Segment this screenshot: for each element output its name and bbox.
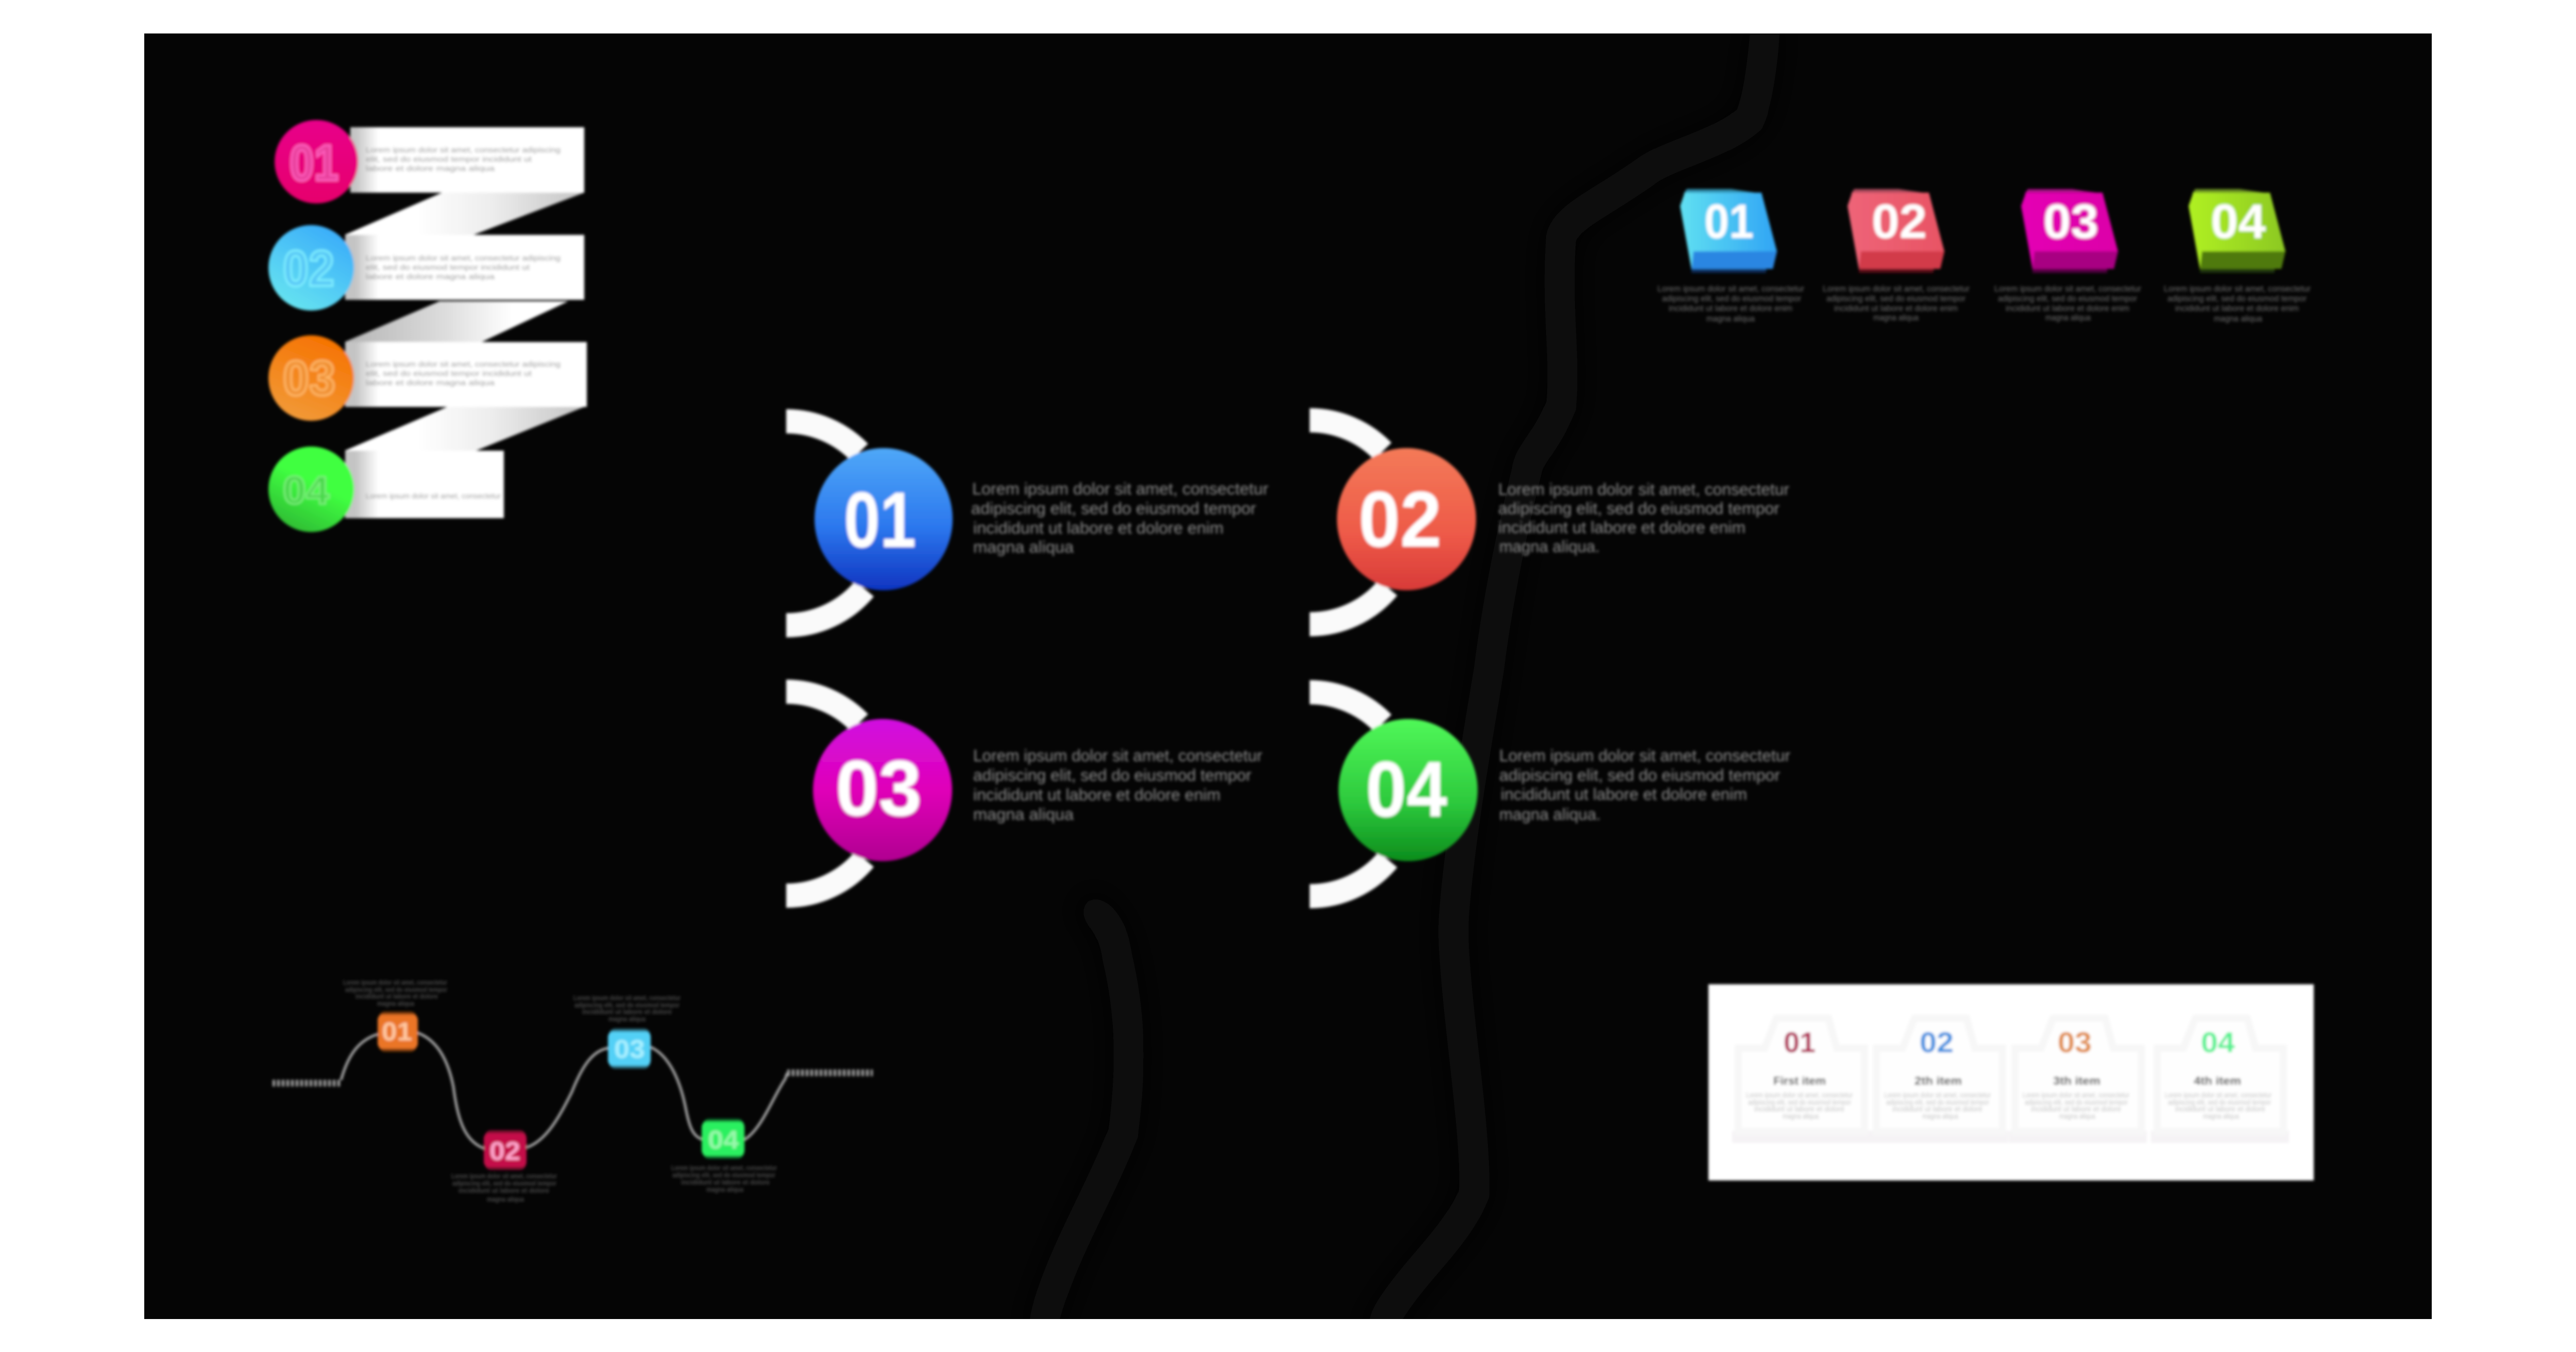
badge text 04: incididunt ut labore et dolore enim bbox=[1501, 785, 1747, 803]
wave label 03 bbox=[573, 994, 681, 1023]
number circle 02 bbox=[268, 225, 354, 311]
block 03: 03 bbox=[2043, 194, 2098, 248]
block 01 text: magna aliqua bbox=[1706, 314, 1755, 323]
block 01 text bbox=[1657, 284, 1804, 323]
wave label 02: incididunt ut labore et dolore bbox=[459, 1186, 549, 1194]
badge text 03 bbox=[973, 746, 1262, 824]
card 04: magna aliqua bbox=[2203, 1112, 2240, 1121]
number circle 03: 03 bbox=[283, 351, 335, 406]
card 01: 01 bbox=[1784, 1026, 1816, 1058]
panel: white card strip bbox=[1708, 984, 2314, 1180]
marker 02 bbox=[484, 1130, 527, 1170]
panel: glossy badge 01 bbox=[786, 421, 1268, 625]
faint smoke background bbox=[1039, 21, 1766, 1339]
wave label 03: incididunt ut labore et dolore bbox=[582, 1007, 672, 1016]
badge text 03: adipiscing elit, sed do eiusmod tempor bbox=[973, 766, 1251, 784]
block 03 text: Lorem ipsum dolor sit amet, consectetur bbox=[1994, 284, 2141, 294]
card 02: 2th item bbox=[1914, 1074, 1962, 1087]
card 03: incididunt ut labore et dolore bbox=[2031, 1105, 2121, 1114]
badge text 02: Lorem ipsum dolor sit amet, consectetur bbox=[1498, 480, 1789, 499]
marker 03: 03 bbox=[614, 1035, 645, 1064]
card 01: Lorem ipsum dolor sit amet, consectetur bbox=[1746, 1091, 1853, 1100]
block 04 text bbox=[2164, 284, 2311, 323]
marker 04 bbox=[702, 1119, 744, 1159]
ribbon bar 1 bbox=[350, 127, 584, 193]
block 03 text bbox=[1994, 284, 2141, 322]
block 03 bbox=[2021, 189, 2118, 273]
block 01 bbox=[1680, 189, 1777, 273]
badge text 01: incididunt ut labore et dolore enim bbox=[973, 519, 1224, 537]
block 04 bbox=[2189, 189, 2285, 273]
wave label 03: magna aliqua bbox=[608, 1015, 646, 1023]
wave label 03: Lorem ipsum dolor sit amet, consectetur bbox=[573, 994, 681, 1002]
badge number 04: 04 bbox=[1366, 745, 1447, 833]
panel: glossy badge 04 bbox=[1310, 692, 1790, 896]
wave label 02: magna aliqua bbox=[487, 1195, 524, 1203]
wave label 04: magna aliqua bbox=[706, 1185, 743, 1193]
badge text 02: magna aliqua. bbox=[1499, 537, 1600, 556]
card 01: adipiscing elit, sed do eiusmod tempor bbox=[1748, 1098, 1851, 1107]
card 03: magna aliqua bbox=[2059, 1112, 2096, 1121]
block 01 text: incididunt ut labore et dolore enim bbox=[1669, 303, 1792, 313]
block 04 text: magna aliqua bbox=[2214, 314, 2262, 323]
number circle 01: 01 bbox=[290, 134, 338, 191]
badge text 01 bbox=[971, 480, 1268, 556]
wave label 02: Lorem ipsum dolor sit amet, consectetur bbox=[451, 1172, 557, 1180]
card 04: 04 bbox=[2201, 1026, 2235, 1058]
ribbon bar 2: Lorem ipsum dolor sit amet, consectetur adipiscing bbox=[366, 254, 561, 263]
block 02 text: adipiscing elit, sed do eiusmod tempor bbox=[1826, 294, 1965, 303]
ribbon bar 4 bbox=[345, 451, 504, 518]
number circle 02: 02 bbox=[283, 240, 334, 297]
block 02 text: incididunt ut labore et dolore enim bbox=[1834, 303, 1958, 313]
card 02: adipiscing elit, sed do eiusmod tempor bbox=[1886, 1098, 1989, 1107]
badge text 04 bbox=[1499, 746, 1790, 824]
number circle 01 bbox=[275, 120, 358, 203]
ribbon bar 3: Lorem ipsum dolor sit amet, consectetur adipiscing bbox=[366, 360, 561, 369]
badge text 01: Lorem ipsum dolor sit amet, consectetur bbox=[972, 480, 1268, 498]
number circle 04: 04 bbox=[283, 469, 329, 512]
badge number 03: 03 bbox=[836, 744, 922, 832]
block 03 text: adipiscing elit, sed do eiusmod tempor bbox=[1998, 294, 2137, 303]
card 01: magna aliqua bbox=[1783, 1112, 1819, 1121]
arc brackets 03 bbox=[786, 692, 865, 896]
block 02: 02 bbox=[1872, 194, 1927, 248]
block 04: 04 bbox=[2211, 194, 2266, 248]
marker 01: 01 bbox=[382, 1017, 412, 1046]
panel: glossy badge 02 bbox=[1310, 420, 1789, 624]
marker 03 bbox=[608, 1029, 651, 1069]
arc brackets 02 bbox=[1310, 420, 1388, 624]
wave label 01: adipiscing elit, sed do eiusmod tempor bbox=[345, 985, 447, 994]
card 04: incididunt ut labore et dolore bbox=[2175, 1105, 2265, 1114]
badge text 02 bbox=[1498, 480, 1789, 556]
card 04: adipiscing elit, sed do eiusmod tempor bbox=[2168, 1098, 2271, 1107]
card 03: adipiscing elit, sed do eiusmod tempor bbox=[2025, 1098, 2128, 1107]
badge text 02: adipiscing elit, sed do eiusmod tempor bbox=[1498, 499, 1780, 518]
arc brackets 01 bbox=[786, 421, 865, 625]
block 04 text: Lorem ipsum dolor sit amet, consectetur bbox=[2164, 284, 2311, 294]
wave label 02: adipiscing elit, sed do eiusmod tempor bbox=[452, 1179, 556, 1187]
ribbon bar 1: elit, sed do eiusmod tempor incididunt ut bbox=[366, 155, 532, 164]
block 04 text: incididunt ut labore et dolore enim bbox=[2175, 303, 2299, 313]
block 01 text: adipiscing elit, sed do eiusmod tempor bbox=[1662, 294, 1801, 303]
ribbon fold 3 bbox=[345, 407, 584, 451]
wave label 02 bbox=[451, 1172, 557, 1203]
badge number 02: 02 bbox=[1359, 475, 1442, 563]
wave label 01: Lorem ipsum dolor sit amet, consectetur bbox=[343, 978, 447, 986]
wave label 04: Lorem ipsum dolor sit amet, consectetur bbox=[671, 1163, 777, 1172]
badge circle 04 bbox=[1338, 719, 1478, 861]
arc brackets 04 bbox=[1310, 692, 1388, 896]
card 04 bbox=[2151, 1018, 2289, 1143]
wave label 03: adipiscing elit, sed do eiusmod tempor bbox=[574, 1001, 680, 1009]
badge text 04: adipiscing elit, sed do eiusmod tempor bbox=[1499, 766, 1780, 784]
badge number 01: 01 bbox=[844, 476, 916, 564]
block 03 text: magna aliqua bbox=[2045, 313, 2091, 322]
badge circle 01 bbox=[815, 448, 953, 590]
badge text 02: incididunt ut labore et dolore enim bbox=[1498, 518, 1745, 537]
card 02: Lorem ipsum dolor sit amet, consectetur bbox=[1884, 1091, 1991, 1100]
ribbon bar 3: labore et dolore magna aliqua bbox=[366, 379, 495, 387]
all blurred content bbox=[268, 120, 2314, 1203]
badge text 04: Lorem ipsum dolor sit amet, consectetur bbox=[1499, 746, 1790, 765]
badge text 03: incididunt ut labore et dolore enim bbox=[973, 785, 1221, 804]
wave label 01: magna aliqua bbox=[377, 999, 414, 1007]
card 01: incididunt ut labore et dolore bbox=[1754, 1105, 1844, 1114]
ribbon bar 1: labore et dolore magna aliqua bbox=[366, 164, 495, 173]
number circle 03 bbox=[268, 335, 354, 421]
white card background bbox=[1708, 984, 2314, 1180]
panel: wave timeline bbox=[273, 978, 873, 1203]
card 02: 02 bbox=[1920, 1026, 1954, 1058]
block 02 bbox=[1848, 189, 1944, 273]
marker 02: 02 bbox=[489, 1137, 520, 1166]
card 01: First item bbox=[1773, 1074, 1826, 1087]
number circle 04 bbox=[268, 447, 354, 532]
block 02 text bbox=[1823, 284, 1970, 322]
ribbon bar 3: elit, sed do eiusmod tempor incididunt ut bbox=[366, 369, 532, 378]
panel: glossy badge 03 bbox=[786, 692, 1262, 896]
card 01 bbox=[1732, 1018, 1870, 1143]
badge text 03: Lorem ipsum dolor sit amet, consectetur bbox=[973, 746, 1262, 765]
badge circle 03 bbox=[813, 719, 952, 861]
card 02 bbox=[1870, 1018, 2008, 1143]
ribbon bar 2 bbox=[345, 235, 584, 300]
ribbon bar 2: labore et dolore magna aliqua bbox=[366, 272, 495, 281]
badge text 04: magna aliqua. bbox=[1499, 805, 1601, 824]
block 02 text: Lorem ipsum dolor sit amet, consectetur bbox=[1823, 284, 1970, 294]
block 03 text: incididunt ut labore et dolore enim bbox=[2006, 303, 2129, 313]
badge circle 02 bbox=[1337, 448, 1476, 590]
block 01: 01 bbox=[1704, 194, 1754, 248]
block 01 text: Lorem ipsum dolor sit amet, consectetur bbox=[1657, 284, 1804, 294]
wave label 04: incididunt ut labore et dolore bbox=[681, 1178, 770, 1186]
panel: 3D block labels bbox=[1657, 189, 2311, 323]
panel: folded ribbon list bbox=[268, 120, 587, 532]
wave label 04 bbox=[671, 1163, 777, 1193]
badge text 01: adipiscing elit, sed do eiusmod tempor bbox=[971, 499, 1256, 518]
card 03: Lorem ipsum dolor sit amet, consectetur bbox=[2023, 1091, 2129, 1100]
wave label 04: adipiscing elit, sed do eiusmod tempor bbox=[672, 1171, 775, 1179]
card 03: 03 bbox=[2058, 1026, 2092, 1058]
marker 04: 04 bbox=[708, 1125, 739, 1154]
ribbon bar 2: elit, sed do eiusmod tempor incididunt ut bbox=[366, 263, 530, 272]
block 02 text: magna aliqua bbox=[1873, 313, 1919, 322]
badge text 01: magna aliqua bbox=[973, 538, 1074, 556]
card 02: incididunt ut labore et dolore bbox=[1892, 1105, 1982, 1114]
ribbon fold 1 bbox=[345, 193, 584, 235]
card 04: 4th item bbox=[2194, 1074, 2241, 1087]
ribbon bar 1: Lorem ipsum dolor sit amet, consectetur adipiscing bbox=[366, 146, 561, 155]
marker 01 bbox=[378, 1012, 418, 1052]
wave label 01 bbox=[343, 978, 447, 1007]
ribbon fold 2 bbox=[345, 301, 568, 342]
badge text 03: magna aliqua bbox=[973, 805, 1074, 824]
card 04: Lorem ipsum dolor sit amet, consectetur bbox=[2165, 1091, 2272, 1100]
card 02: magna aliqua bbox=[1922, 1112, 1959, 1121]
wave label 01: incididunt ut labore et dolore bbox=[355, 992, 438, 1000]
ribbon bar 3 bbox=[345, 342, 587, 407]
card 03: 3th item bbox=[2053, 1074, 2100, 1087]
card 03 bbox=[2009, 1018, 2147, 1143]
wave line bbox=[273, 1033, 873, 1149]
block 04 text: adipiscing elit, sed do eiusmod tempor bbox=[2167, 294, 2307, 303]
ribbon bar 4: Lorem ipsum dolor sit amet, consectetur bbox=[366, 492, 501, 501]
